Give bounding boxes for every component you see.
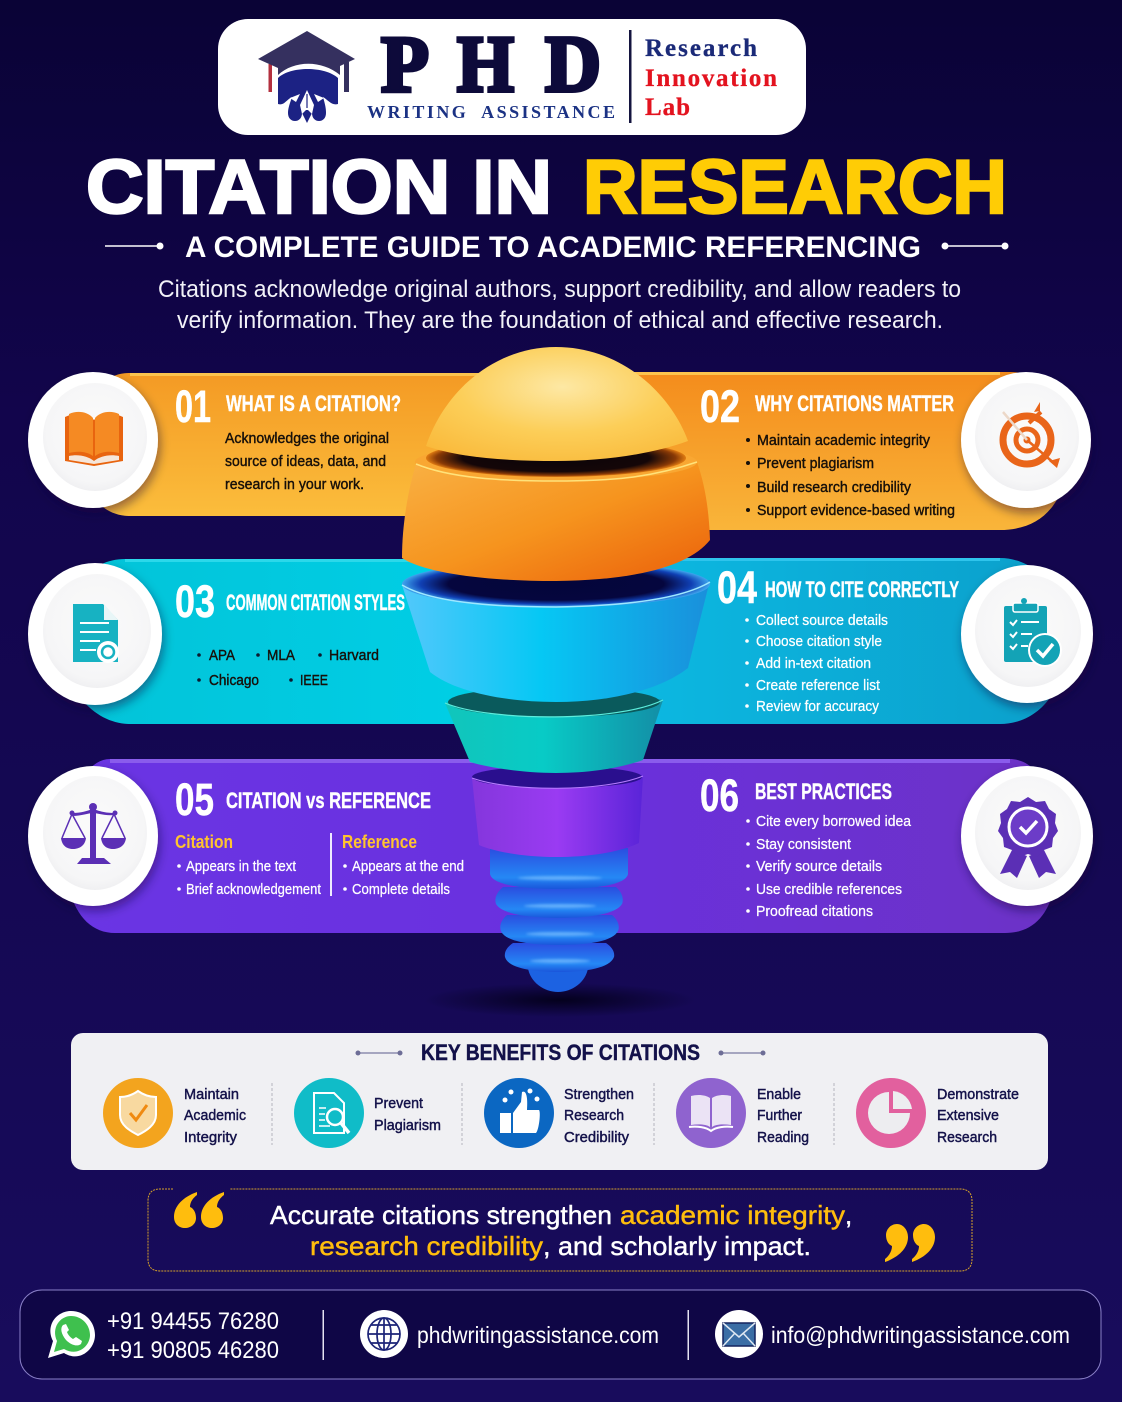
benefit: academic integrity: Maintain bbox=[184, 1086, 239, 1103]
benefit: further reading bbox=[676, 1078, 809, 1148]
list: best practices: Use credible references bbox=[756, 882, 902, 898]
icon: mail bbox=[715, 1310, 763, 1358]
icon: whatsapp bbox=[48, 1311, 95, 1358]
list: best practices: Cite every borrowed idea bbox=[756, 814, 912, 830]
panel: 04 how to cite correctly bbox=[620, 558, 1093, 724]
list: best practices: Proofread citations bbox=[756, 904, 873, 920]
list: best practices: Stay consistent bbox=[756, 837, 851, 853]
purple collar bbox=[472, 766, 643, 857]
benefit: further reading: Enable bbox=[757, 1086, 801, 1103]
lab tagline: Research bbox=[645, 35, 757, 62]
panel: 03 common citation styles: 03 bbox=[175, 576, 215, 627]
phone numbers bbox=[107, 1308, 279, 1364]
list: styles bbox=[197, 648, 379, 689]
yellow dome bbox=[426, 347, 688, 461]
text block: definition: Acknowledges the original bbox=[225, 431, 389, 447]
panel: 03 common citation styles bbox=[28, 559, 500, 724]
quote text: academic integrity bbox=[620, 1200, 845, 1230]
benefit: research credibility bbox=[484, 1078, 634, 1148]
benefit: prevent plagiarism: Plagiarism bbox=[374, 1117, 441, 1134]
central layered light bulb bbox=[402, 347, 710, 1017]
list: reasons: Support evidence-based writing bbox=[757, 503, 955, 519]
heading: KEY BENEFITS OF CITATIONS bbox=[421, 1040, 700, 1065]
intro paragraph bbox=[158, 276, 961, 334]
list: reasons bbox=[746, 433, 955, 519]
icon: open book bbox=[676, 1078, 746, 1148]
column: reference: Appears at the end bbox=[352, 859, 464, 875]
icon button: clipboard bbox=[961, 565, 1093, 703]
benefit: extensive research: Demonstrate bbox=[937, 1086, 1019, 1103]
benefit: academic integrity: Integrity bbox=[184, 1129, 237, 1146]
logo wordmark: H bbox=[457, 21, 514, 109]
icon: opening quote mark bbox=[174, 1192, 224, 1228]
list: steps: Create reference list bbox=[756, 678, 880, 694]
benefit: research credibility: Credibility bbox=[564, 1129, 629, 1146]
list: styles: Harvard bbox=[329, 648, 379, 664]
bulb tip bbox=[528, 968, 588, 992]
list: steps bbox=[745, 613, 888, 715]
list: steps: Choose citation style bbox=[756, 634, 882, 650]
benefit: extensive research: Research bbox=[937, 1129, 997, 1146]
panel: 04 how to cite correctly: 04 bbox=[717, 562, 757, 613]
logo wordmark: WRITING ASSISTANCE bbox=[367, 102, 615, 122]
panel: 01 what is a citation bbox=[28, 372, 500, 516]
callout: quote bbox=[148, 1189, 972, 1271]
subtitle: A COMPLETE GUIDE TO ACADEMIC REFERENCING bbox=[185, 231, 921, 264]
phone numbers: +91 90805 46280 bbox=[107, 1337, 279, 1364]
column: reference: Complete details bbox=[352, 882, 450, 898]
column: citation bbox=[175, 832, 321, 898]
panel: 02 why citations matter bbox=[620, 372, 1091, 530]
panel: 05 and 06 purple band: CITATION vs REFERENCE bbox=[226, 788, 431, 813]
list: best practices bbox=[746, 814, 912, 920]
panel: 02 why citations matter: WHY CITATIONS MATTER bbox=[755, 391, 954, 416]
quote text: research credibility bbox=[310, 1231, 543, 1261]
benefit: research credibility: Strengthen bbox=[564, 1086, 634, 1103]
panel: 05 and 06 purple band bbox=[28, 759, 1093, 933]
column: citation: Appears in the text bbox=[186, 859, 296, 875]
icon: closing quote mark bbox=[885, 1224, 935, 1262]
column: citation: Citation bbox=[175, 832, 233, 852]
text block: definition: research in your work. bbox=[225, 477, 364, 493]
screw ribs bbox=[490, 848, 628, 972]
benefit: extensive research bbox=[856, 1078, 1019, 1148]
icon button: award badge bbox=[961, 766, 1093, 906]
list: steps: Review for accuracy bbox=[756, 699, 880, 715]
panel: 01 what is a citation: 01 bbox=[175, 381, 211, 432]
column: reference bbox=[342, 832, 464, 898]
lab tagline: Innovation bbox=[645, 65, 777, 92]
quote text: , bbox=[845, 1200, 852, 1230]
title: RESEARCH bbox=[583, 145, 1007, 230]
panel: contact footer: info@phdwritingassistance.com bbox=[771, 1322, 1070, 1348]
list: styles: APA bbox=[209, 648, 235, 664]
icon: thumbs up with stars bbox=[484, 1078, 554, 1148]
logo panel bbox=[218, 19, 806, 135]
list: reasons: Build research credibility bbox=[757, 480, 912, 496]
list: best practices: Verify source details bbox=[756, 859, 882, 875]
icon button: target bbox=[961, 372, 1091, 508]
benefit: prevent plagiarism bbox=[294, 1078, 441, 1148]
list: styles: MLA bbox=[267, 648, 295, 664]
list: styles: IEEE bbox=[300, 673, 328, 689]
list: steps: Add in-text citation bbox=[756, 656, 871, 672]
text block: definition: source of ideas, data, and bbox=[225, 454, 386, 470]
benefit: research credibility: Research bbox=[564, 1107, 624, 1124]
intro paragraph: Citations acknowledge original authors, support credibility, and allow readers to bbox=[158, 276, 961, 303]
benefit: further reading: Further bbox=[757, 1107, 802, 1124]
panel: key benefits bbox=[71, 1033, 1048, 1170]
benefit: prevent plagiarism: Prevent bbox=[374, 1095, 424, 1112]
icon: pie chart bbox=[856, 1078, 926, 1148]
logo wordmark: P bbox=[381, 21, 429, 109]
title bbox=[86, 145, 1007, 230]
column: citation: Brief acknowledgement bbox=[186, 882, 321, 898]
panel: 01 what is a citation: WHAT IS A CITATION? bbox=[226, 391, 401, 416]
phone numbers: +91 94455 76280 bbox=[107, 1308, 279, 1335]
teal layer bbox=[445, 687, 663, 773]
panel: 02 why citations matter: 02 bbox=[700, 381, 740, 432]
panel: contact footer bbox=[20, 1290, 1101, 1379]
title: CITATION IN bbox=[86, 145, 552, 230]
panel: 03 common citation styles: COMMON CITATION STYLES bbox=[226, 590, 405, 615]
list: styles: Chicago bbox=[209, 673, 259, 689]
panel: 05 and 06 purple band: BEST PRACTICES bbox=[755, 779, 892, 804]
benefit: further reading: Reading bbox=[757, 1129, 809, 1146]
lab tagline: Lab bbox=[645, 94, 690, 121]
column: reference: Reference bbox=[342, 832, 417, 852]
icon: graduation cap and pen nib bbox=[258, 31, 355, 123]
list: reasons: Prevent plagiarism bbox=[757, 456, 874, 472]
logo wordmark: D bbox=[545, 21, 601, 109]
quote text: , and scholarly impact. bbox=[543, 1231, 811, 1261]
icon: shield bbox=[103, 1078, 173, 1148]
benefit: academic integrity: Academic bbox=[184, 1107, 246, 1124]
list: reasons: Maintain academic integrity bbox=[757, 433, 931, 449]
bulb shadow bbox=[425, 983, 695, 1017]
icon button: open book bbox=[28, 372, 158, 508]
icon button: scales bbox=[28, 766, 158, 906]
logo wordmark bbox=[367, 21, 615, 122]
orange layer bbox=[402, 439, 710, 581]
lab tagline bbox=[645, 35, 777, 121]
benefit: academic integrity bbox=[103, 1078, 246, 1148]
list: steps: Collect source details bbox=[756, 613, 888, 629]
quote text: Accurate citations strengthen bbox=[270, 1200, 612, 1230]
panel: 05 and 06 purple band: 06 bbox=[700, 770, 739, 821]
blue layer bbox=[402, 561, 710, 702]
benefit: extensive research: Extensive bbox=[937, 1107, 999, 1124]
intro paragraph: verify information. They are the foundation of ethical and effective research. bbox=[177, 307, 943, 334]
text block: definition bbox=[225, 431, 389, 493]
panel: 04 how to cite correctly: HOW TO CITE CORRECTLY bbox=[765, 577, 959, 602]
quote text bbox=[270, 1200, 852, 1261]
icon button: document bbox=[28, 563, 162, 705]
panel: contact footer: phdwritingassistance.com bbox=[417, 1322, 659, 1348]
icon: globe bbox=[360, 1310, 408, 1358]
panel: 05 and 06 purple band: 05 bbox=[175, 774, 214, 825]
icon: document search bbox=[294, 1078, 364, 1148]
